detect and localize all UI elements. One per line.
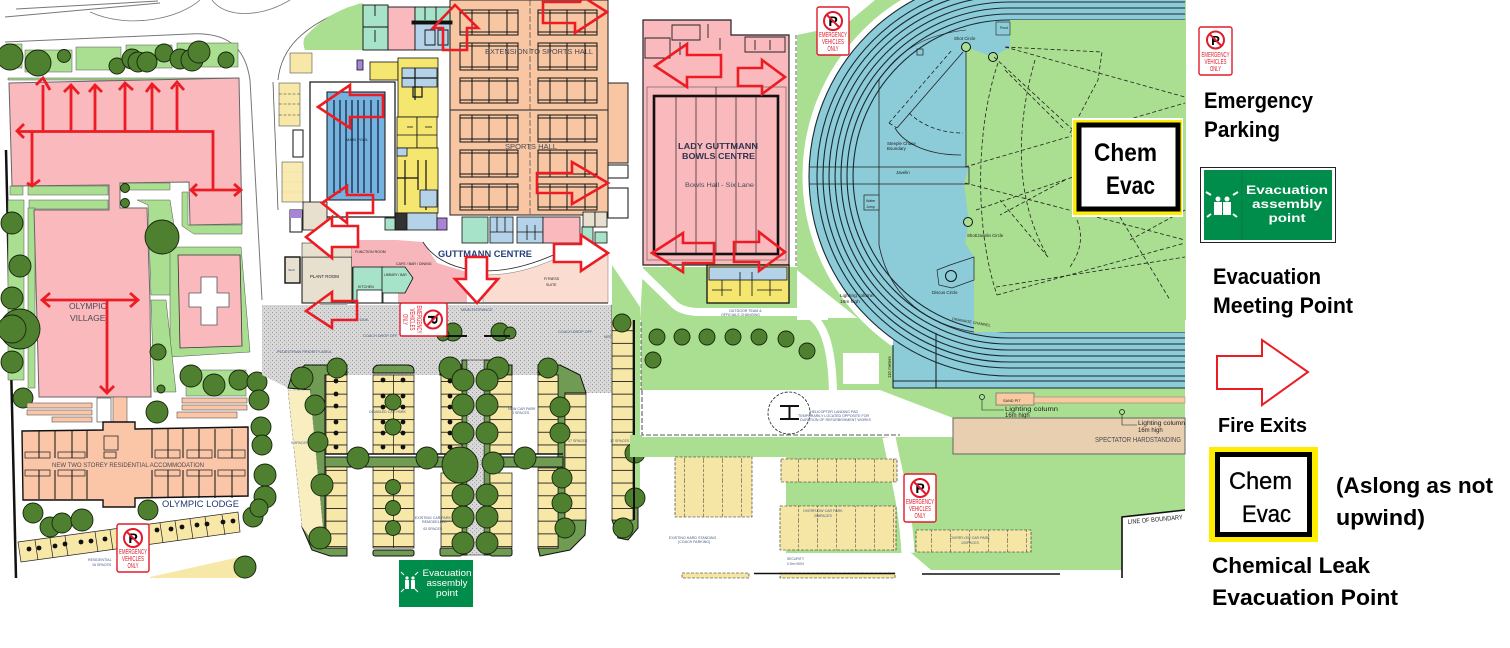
sand pit and spectator hardstanding: 16m high (1138, 428, 1163, 434)
text: Evacuation Meeting Point: Evacuation (1213, 264, 1321, 289)
labels: athletics field: Jump (866, 205, 875, 209)
text: Chemical Leak Evacuation Point: Chemical Leak (1212, 553, 1371, 578)
labels: athletics field: Lighting column (840, 293, 874, 299)
overflow car parks (675, 457, 1031, 578)
building: Lady Guttmann Bowls Centre: LADY GUTTMANN (678, 141, 758, 151)
fire exit arrow: plant room (306, 292, 357, 328)
legend: evacuation meeting point (1200, 168, 1354, 318)
trees: Olympic Lodge (23, 365, 276, 578)
text: Emergency Parking (1204, 88, 1314, 142)
car park bays (288, 305, 633, 548)
helipad apron and roads (636, 0, 1009, 553)
icon: emergency parking sign: ONLY (1210, 66, 1221, 73)
label: residential parking (88, 558, 112, 567)
rooms: south concourse (303, 202, 607, 243)
icon: evacuation assembly point sign: point (1268, 211, 1306, 225)
text: Evacuation Meeting Point: Meeting Point (1213, 293, 1354, 318)
room: plant room: NEW (288, 268, 295, 272)
labels: forecourt: PEDESTRIAN PRIORITY AREA (277, 350, 332, 354)
legend: chemical leak evacuation point (1209, 447, 1494, 610)
labels: overflow parking and hard standing: 208PACES (814, 514, 833, 518)
labels: overflow parking and hard standing: EXISTING HARD STANDING (669, 536, 716, 540)
car park frames (288, 360, 638, 556)
legend: fire exits (1217, 340, 1308, 437)
rooms: changing and service core (357, 58, 447, 230)
sand pit and spectator hardstanding: Lighting column (1005, 407, 1058, 413)
room: fitness suite (302, 242, 608, 303)
text: Emergency Parking: Parking (1204, 117, 1280, 142)
icon: chem evac box (1209, 447, 1318, 542)
text: wind caveat (1336, 473, 1494, 530)
room: cafe and function room: KITCHEN (358, 285, 374, 289)
labels: athletics field: Javelin (896, 170, 910, 175)
icon: emergency parking sign, Olympic Lodge: EMERGENCY (119, 549, 147, 556)
label: helicopter landing pad: TEMPORARILY LOCATED OPPOSITE FOR (798, 414, 869, 418)
heading: Olympic Lodge: OLYMPIC LODGE (162, 499, 239, 509)
panel: Olympic Village grounds (0, 41, 250, 408)
icon: evacuation assembly point sign on map: point (436, 588, 459, 598)
panel: Olympic Lodge residential block (18, 365, 276, 578)
sand pit and spectator hardstanding: 110 meters (887, 356, 892, 378)
panel: Guttmann Centre (279, 0, 628, 317)
labels: athletics field: Discus Circle (932, 290, 958, 295)
icon: emergency parking sign, top of map: EMERGENCY (819, 32, 847, 39)
icon: emergency parking sign, east field: EMERGENCY (906, 499, 934, 506)
pool: main pool: MAIN POOL (346, 137, 369, 142)
fire exit arrow: pool north (318, 85, 383, 128)
room: cafe and function room: CAFE / BAR / DINING (396, 262, 432, 266)
icon: evacuation assembly point sign on map: Evacuation (422, 568, 472, 578)
labels: car parks: REMODELLED (422, 520, 447, 524)
labels: athletics field: Boundary (887, 146, 907, 151)
icon: emergency parking sign, top of map: P (828, 13, 838, 29)
fire exit arrow: bowls south west (652, 233, 714, 272)
text: wind caveat: (Aslong as not (1336, 473, 1494, 498)
labels: overflow parking and hard standing: 0.5m HIGH (787, 562, 805, 566)
building: Lady Guttmann Bowls Centre (643, 20, 789, 265)
fire exit arrow: bowls north west (655, 44, 721, 87)
icon: fire exit arrow (1217, 340, 1308, 405)
room: plant room: PLANT ROOM (310, 274, 339, 279)
fire exit arrow: sports hall (537, 162, 608, 204)
callout: chem evac point on field: Evac (1106, 172, 1155, 200)
panel: legend (1199, 27, 1494, 610)
labels: forecourt: DELIVERIES SINK (336, 318, 369, 322)
labels: athletics field: Steeple Chase (887, 141, 916, 146)
labels: athletics field: DRAINAGE CHANNEL (952, 317, 991, 328)
icon: emergency parking sign, top of map: VEHICLES (822, 39, 844, 46)
building: Olympic Lodge (22, 397, 248, 507)
building: Extension to Sports Hall and Sports Hall: EXTENSION TO SPORTS HALL (485, 49, 593, 56)
icon: evacuation assembly point sign on map: assembly (426, 578, 468, 588)
room: cafe and function room: LIBRARY / BAR (384, 273, 407, 277)
sand pit and spectator hardstanding: Lighting column (1138, 421, 1185, 427)
label: outdoor team changing: OFFICIALS CHANGING (721, 313, 760, 317)
labels: car parks (291, 407, 630, 531)
light green verge (633, 320, 640, 490)
fire exit arrow: bowls north east (738, 60, 785, 94)
icon: emergency parking sign, east field: P (915, 480, 925, 496)
sand pit and spectator hardstanding: SPECTATOR HARDSTANDING (1095, 435, 1181, 444)
icon: evacuation assembly point sign (1200, 168, 1336, 242)
rooms: north block (363, 5, 452, 50)
athletics field (809, 20, 1185, 332)
icon: emergency parking sign, Olympic Lodge: P (128, 530, 138, 546)
building: Lady Guttmann Bowls Centre: Bowls Hall - Six Lane (685, 182, 754, 189)
fire exit arrow: main entrance (455, 257, 498, 303)
sand pit and spectator hardstanding: SAND PIT (1003, 399, 1021, 403)
heading: Olympic Village (69, 301, 107, 323)
icon: emergency parking sign: P (1211, 33, 1220, 48)
arrows: Olympic Village exit routes (17, 78, 241, 393)
building: Extension to Sports Hall and Sports Hall (450, 0, 628, 218)
legend: emergency parking (1199, 27, 1314, 142)
text: Chemical Leak Evacuation Point (1212, 553, 1399, 610)
icon: emergency parking sign, forecourt (rotated): ONLY (401, 314, 408, 325)
icon: helicopter landing pad (768, 392, 810, 434)
green lawns (6, 43, 250, 396)
label: residential accommodation: NEW TWO STOREY RESIDENTIAL ACCOMMODATION (52, 462, 204, 469)
text: Evacuation Meeting Point (1213, 264, 1354, 318)
labels: car parks: NEW CAR PARK (508, 407, 536, 411)
room: fitness suite: SUITE (546, 283, 557, 287)
labels: car parks: 0 SPACES (512, 411, 530, 415)
label: helicopter landing pad: HELICOPTER LANDING PAD (810, 410, 858, 414)
accessible bay symbols (334, 378, 452, 449)
black kerb bars (443, 300, 634, 520)
room: cafe and function room (320, 240, 467, 317)
label: outdoor team changing: OUTDOOR TEAM & (729, 309, 762, 313)
callout: chem evac point on field: Chem (1094, 139, 1157, 167)
labels: athletics field: 16m high (840, 299, 860, 305)
labels: car parks: 17 SPACES (610, 439, 630, 443)
labels: car parks: 9 SPACES (291, 441, 309, 445)
running track (809, 0, 1185, 388)
icon: emergency parking sign, east field: VEHICLES (909, 506, 931, 513)
fire exit arrow: north block (433, 5, 478, 50)
labels: car parks: 17 SPACES (568, 439, 588, 443)
building: Extension to Sports Hall and Sports Hall: SPORTS HALL (505, 144, 557, 151)
labels: forecourt (277, 308, 633, 354)
arrows: fire exits (306, 0, 785, 328)
panel: forecourt and car parks (262, 300, 645, 556)
labels: athletics field: Shot Circle (954, 36, 976, 41)
pool: main pool (310, 82, 395, 217)
trees: Olympic Village (0, 41, 234, 408)
label: residential parking: RESIDENTIAL (88, 558, 112, 562)
labels: forecourt: MOTOR CYCLES (604, 335, 633, 339)
icon: emergency parking sign, east field (904, 474, 936, 522)
labels: forecourt: COACH DROP OFF (363, 334, 398, 338)
fire exit arrow: pool south (322, 186, 373, 223)
fire exit arrow: bowls south east (734, 232, 785, 271)
building: bowls changing rooms (707, 265, 789, 303)
heading: Guttmann Centre: GUTTMANN CENTRE (438, 249, 532, 260)
icon: emergency parking sign, forecourt (rotated): P (425, 315, 441, 324)
line of boundary (754, 510, 1185, 578)
labels: car parks: DISABLED CAR PARK (369, 410, 406, 414)
icon: emergency parking sign: VEHICLES (1204, 59, 1227, 66)
label: residential parking: 16 SPACES (92, 563, 112, 567)
labels: overflow parking and hard standing: SECURITY (787, 557, 805, 561)
icon: emergency parking sign, Olympic Lodge: VEHICLES (122, 556, 144, 563)
sand pit and spectator hardstanding: 16m high (1005, 413, 1030, 419)
icon: evacuation assembly point sign: assembly (1252, 197, 1322, 211)
room: cafe and function room: FUNCTION ROOM (355, 250, 386, 254)
label: outdoor team changing (721, 309, 762, 317)
fire exit arrow: extension hall (543, 0, 607, 33)
room: fitness suite: FITNESS (544, 277, 560, 281)
panel: athletics track and green (612, 0, 1186, 578)
labels: athletics field: Water (866, 199, 876, 203)
central grey walkway (467, 360, 484, 555)
labels: overflow parking and hard standing: OVERFLOW CAR PARK (803, 509, 843, 513)
icon: emergency parking sign (1199, 27, 1232, 75)
labels: overflow parking and hard standing: OVERFLOW CAR PARK (950, 536, 990, 540)
label: helicopter landing pad (798, 410, 872, 422)
sand pit and spectator hardstanding (887, 356, 1185, 454)
labels: athletics field (840, 26, 1008, 328)
building: Lady Guttmann Bowls Centre: BOWLS CENTRE (682, 151, 755, 161)
icon: chem evac box: Evac (1242, 501, 1291, 528)
icon: emergency parking sign, forecourt (rotated): EMERGENCY (415, 306, 422, 334)
fire exit arrow: west corridor (306, 217, 358, 258)
icon: emergency parking sign, Olympic Lodge (117, 524, 149, 572)
icon: emergency parking sign, Olympic Lodge: ONLY (128, 563, 139, 570)
line of boundary: LINE OF BOUNDARY (1128, 514, 1184, 526)
icon: emergency parking sign, forecourt (rotated) (400, 303, 447, 336)
trees: lawn row (613, 314, 815, 368)
fire exit arrow: east corridor (554, 235, 608, 271)
text: Fire Exits: Fire Exits (1218, 415, 1307, 437)
icon: emergency parking sign, forecourt (rotated): VEHICLES (408, 308, 415, 331)
callout: chem evac point on field (1072, 118, 1183, 217)
text: Emergency Parking: Emergency (1204, 88, 1314, 113)
room: plant room (285, 243, 352, 303)
labels: athletics field: Pond (1000, 26, 1008, 30)
icon: chem evac box: Chem (1229, 468, 1292, 495)
building: Olympic Village upper wing (9, 78, 242, 397)
labels: car parks: 43 SPACES (423, 527, 443, 531)
grounds around Guttmann Centre (279, 3, 363, 232)
icon: emergency parking sign, east field: ONLY (914, 513, 926, 520)
labels: car parks: EXISTING CAR PARK (415, 516, 451, 520)
icon: evacuation assembly point sign on map (399, 560, 473, 607)
labels: overflow parking and hard standing (669, 509, 990, 566)
labels: overflow parking and hard standing: (COACH PARKING) (678, 540, 710, 544)
paved pedestrian priority area (262, 305, 612, 393)
labels: athletics field: Shot/Javelin Circle (967, 233, 1004, 238)
icon: emergency parking sign, top of map: ONLY (828, 46, 839, 53)
heading: Olympic Village: OLYMPIC (69, 301, 107, 311)
icon: evacuation assembly point sign: Evacuation (1246, 183, 1328, 197)
text: wind caveat: upwind) (1336, 505, 1425, 530)
icon: emergency parking sign: EMERGENCY (1202, 52, 1230, 59)
labels: forecourt: MAIN ENTRANCE (461, 308, 493, 312)
label: helicopter landing pad: DURATION OF REFURBISHMENT WORKS (800, 418, 872, 422)
building: Olympic Village chapel wing (178, 255, 242, 348)
labels: forecourt: COACH DROP OFF (558, 330, 593, 334)
icon: emergency parking sign, top of map (817, 7, 849, 55)
labels: overflow parking and hard standing: 100PACES (961, 541, 980, 545)
text: Chemical Leak Evacuation Point: Evacuation Point (1212, 585, 1399, 610)
trees: car parks (291, 323, 645, 554)
heading: Olympic Village: VILLAGE (70, 313, 106, 323)
green grounds (612, 0, 1186, 578)
car park: accessible bays (18, 512, 246, 578)
